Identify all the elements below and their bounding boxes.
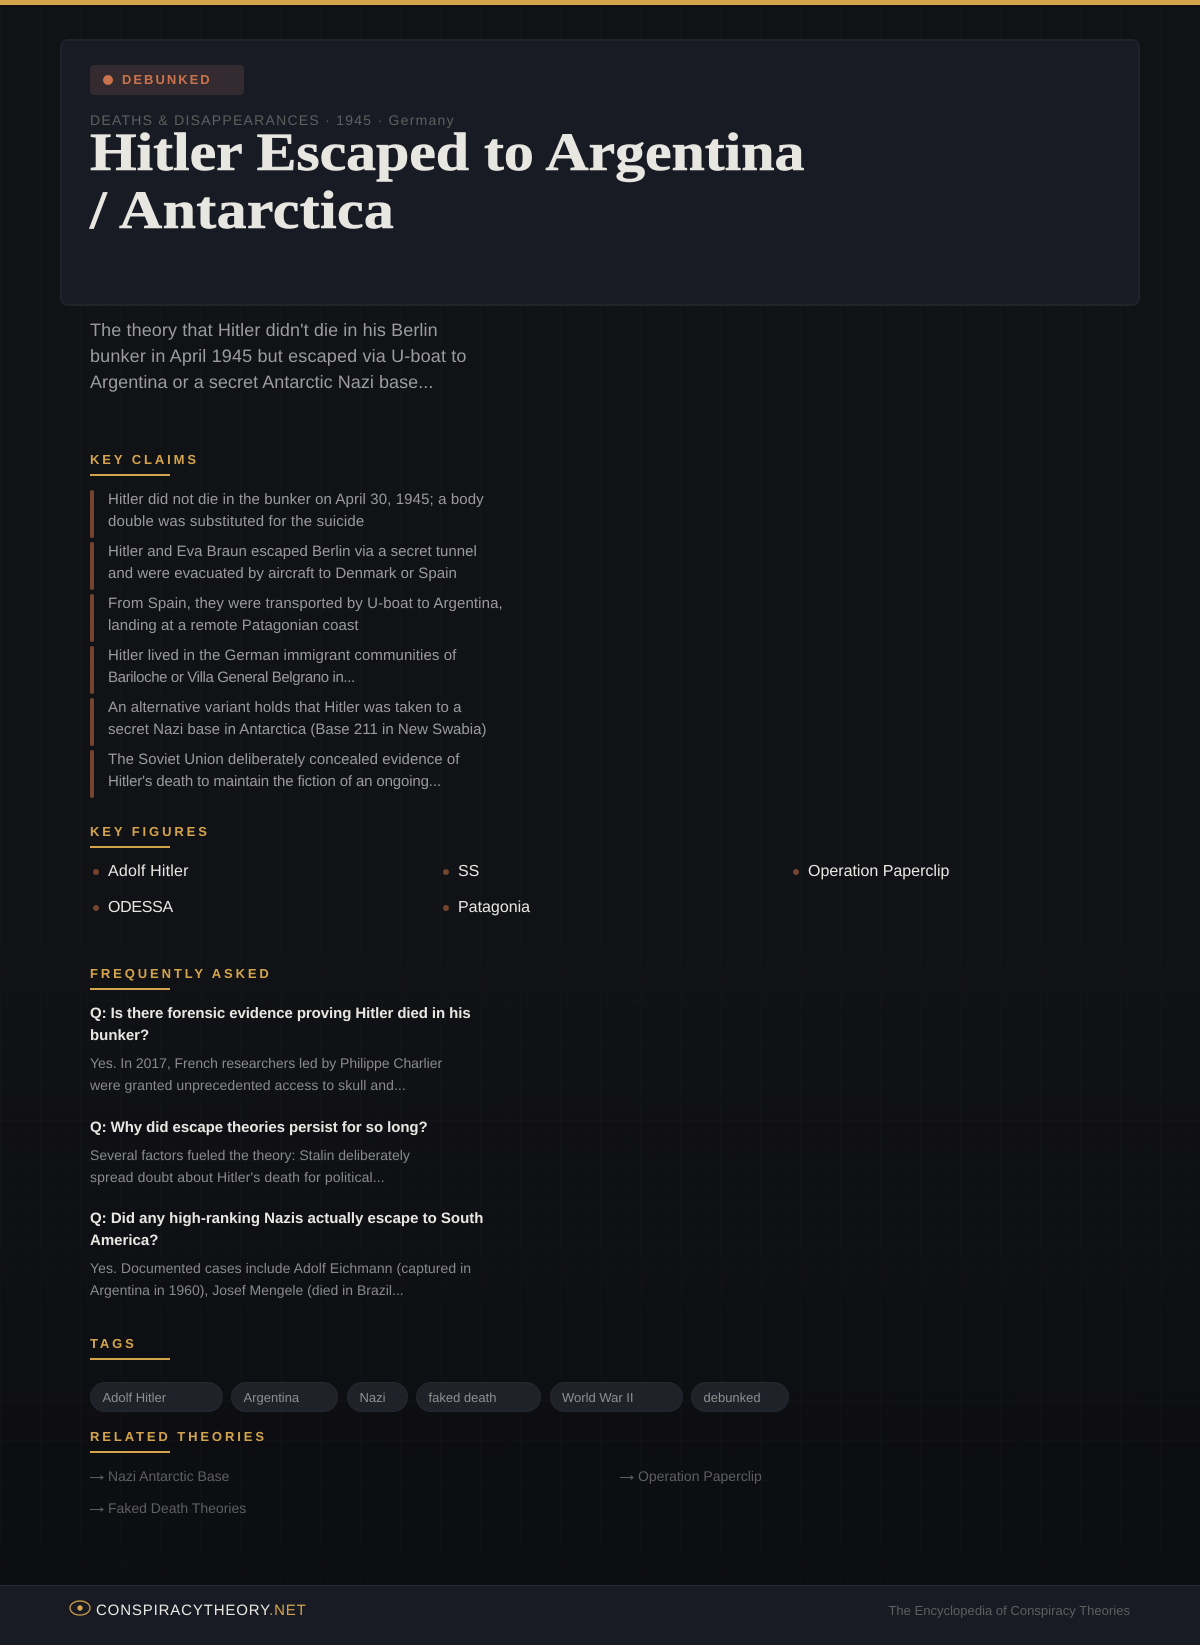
claim 1: double was substituted for the suicide (108, 513, 364, 530)
panel: key claims (90, 490, 503, 798)
claim 6: Hitler's death to maintain the fiction of an ongoing... (108, 773, 441, 790)
heading: key claims: KEY CLAIMS (90, 452, 199, 467)
figure: SS (443, 863, 479, 880)
answer 3: Argentina in 1960), Josef Mengele (died in Brazil... (90, 1282, 404, 1298)
claim 4 (90, 646, 456, 694)
answer 3 (90, 1260, 471, 1298)
claim 5 (90, 698, 487, 746)
answer 2 (90, 1147, 410, 1185)
footer tagline: The Encyclopedia of Conspiracy Theories (888, 1603, 1130, 1618)
figure: ODESSA: ODESSA (108, 899, 173, 916)
question 3: America? (90, 1232, 158, 1249)
logo wordmark: CONSPIRACYTHEORY.NET (96, 1602, 307, 1619)
tag: Adolf Hitler (90, 1382, 223, 1412)
top accent bar (0, 0, 1200, 5)
figure: Patagonia: Patagonia (458, 899, 530, 916)
tag: faked death: faked death (428, 1390, 496, 1405)
heading: key figures: KEY FIGURES (90, 824, 210, 839)
title: Hitler Escaped to Argentina (90, 122, 804, 182)
claim 2 (90, 542, 477, 590)
figure: Adolf Hitler: Adolf Hitler (108, 863, 189, 880)
tag: Argentina (231, 1382, 338, 1412)
claim 2: and were evacuated by aircraft to Denmark or Spain (108, 565, 457, 582)
claim 1: Hitler did not die in the bunker on April 30, 1945; a body (108, 491, 484, 508)
badge label: DEBUNKED (122, 72, 212, 87)
answer 1 (90, 1055, 442, 1093)
title: / Antarctica (90, 180, 394, 240)
tag: debunked: debunked (704, 1390, 761, 1405)
claim 5: An alternative variant holds that Hitler was taken to a (108, 699, 462, 716)
tag: World War II (550, 1382, 682, 1412)
tag: Nazi: Nazi (360, 1390, 386, 1405)
footer (0, 1585, 1200, 1645)
claim 3: From Spain, they were transported by U-boat to Argentina, (108, 595, 503, 612)
title (89, 122, 804, 240)
tag: faked death (416, 1382, 541, 1412)
claim 5: secret Nazi base in Antarctica (Base 211 in New Swabia) (108, 721, 487, 738)
heading: related theories: RELATED THEORIES (90, 1429, 267, 1444)
answer 2: Several factors fueled the theory: Stalin deliberately (90, 1147, 410, 1163)
claim 4: Bariloche or Villa General Belgrano in... (108, 669, 355, 686)
claim 3: landing at a remote Patagonian coast (108, 617, 359, 634)
claim 6: The Soviet Union deliberately concealed evidence of (108, 751, 459, 768)
question 2: Q: Why did escape theories persist for so long? (90, 1119, 428, 1136)
claim 6 (90, 750, 460, 798)
question 1 (90, 1005, 471, 1044)
tag: World War II: World War II (562, 1390, 634, 1405)
claim 4: Hitler lived in the German immigrant communities of (108, 647, 456, 664)
answer 2: spread doubt about Hitler's death for political... (90, 1169, 385, 1185)
intro text (90, 320, 467, 392)
answer 1: Yes. In 2017, French researchers led by Philippe Charlier (90, 1055, 442, 1071)
tag: debunked (691, 1382, 789, 1412)
intro text: Argentina or a secret Antarctic Nazi base... (90, 372, 433, 392)
answer 1: were granted unprecedented access to skull and... (90, 1077, 406, 1093)
intro text: bunker in April 1945 but escaped via U-boat to (90, 346, 467, 366)
question 3: Q: Did any high-ranking Nazis actually escape to South (90, 1210, 483, 1227)
tag: Adolf Hitler: Adolf Hitler (102, 1390, 166, 1405)
question 1: Q: Is there forensic evidence proving Hitler died in his (90, 1005, 471, 1022)
figure: SS: SS (458, 863, 479, 880)
claim 1 (90, 490, 484, 538)
badge: debunked (90, 65, 244, 95)
related link: Faked Death Theories: Faked Death Theories (108, 1500, 246, 1516)
claim 3 (90, 594, 503, 642)
intro text: The theory that Hitler didn't die in his Berlin (90, 320, 438, 340)
panel: header card (60, 39, 1140, 306)
question 3 (90, 1210, 483, 1249)
heading: tags: TAGS (90, 1336, 137, 1351)
related link: Nazi Antarctic Base: Nazi Antarctic Base (108, 1468, 229, 1484)
heading: frequently asked: FREQUENTLY ASKED (90, 966, 272, 981)
claim 2: Hitler and Eva Braun escaped Berlin via a secret tunnel (108, 543, 477, 560)
question 1: bunker? (90, 1027, 149, 1044)
related link: Operation Paperclip: Operation Paperclip (638, 1468, 762, 1484)
answer 3: Yes. Documented cases include Adolf Eichmann (captured in (90, 1260, 471, 1276)
tag: Argentina: Argentina (244, 1390, 299, 1405)
icon: status dot (103, 75, 113, 85)
category and date line: DEATHS & DISAPPEARANCES · 1945 · Germany (90, 112, 455, 128)
icon: eye logo (69, 1600, 91, 1616)
figure: Operation Paperclip: Operation Paperclip (808, 863, 949, 880)
tag: Nazi (347, 1382, 408, 1412)
